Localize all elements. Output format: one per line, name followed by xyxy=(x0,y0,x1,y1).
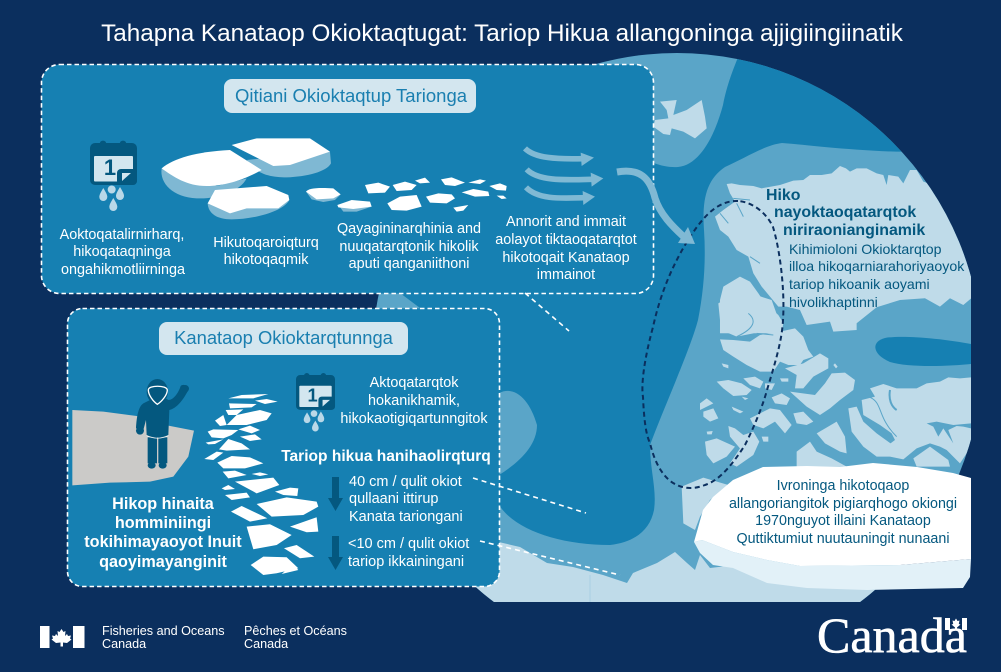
icon: large ice floes xyxy=(161,138,341,219)
panel: Canadian Arctic xyxy=(68,308,500,586)
heading: ice region: niriraonianginamik xyxy=(783,222,925,239)
panel heading pill xyxy=(224,79,476,113)
text: ice region: illoa hikoqarniarahoriyaoyok xyxy=(789,258,965,274)
logo text: French: Pêches et Océans xyxy=(244,624,347,638)
text: ice region: tariop hikoanik aoyami xyxy=(789,276,930,292)
text: step 2: hikotoqaqmik xyxy=(224,252,309,268)
heading: ice region: nayoktaoqatarqtok xyxy=(774,204,916,221)
heading: Inuit: qaoyimayanginit xyxy=(99,553,227,571)
text: 40 cm xyxy=(349,474,463,525)
text: step 4 xyxy=(495,214,637,283)
text: step 4: immainot xyxy=(537,267,595,283)
icon: person in parka xyxy=(136,379,189,469)
text: freeze-up xyxy=(340,375,488,427)
dashed ellipse: ice region xyxy=(642,201,783,488)
text: step 3: aputi qanganiithoni xyxy=(349,256,469,272)
logo text: French: Canada xyxy=(244,637,288,651)
map of the Arctic xyxy=(376,53,971,602)
leader line: 10 cm xyxy=(480,541,620,575)
icon: down arrow xyxy=(328,477,343,511)
text: step 1: Aoktoqatalirnirharq, xyxy=(60,227,184,243)
text: ice region: Kihimioloni Okioktarqtop xyxy=(789,241,942,257)
text: freeze-up: hikokaotigiqartunngitok xyxy=(340,411,488,427)
text: step 4: Annorit and immait xyxy=(506,214,626,230)
heading: Inuit: tokihimayaoyot Inuit xyxy=(84,533,242,551)
logo text: English: Canada xyxy=(102,637,146,651)
heading: sea ice decline: Tariop hikua hanihaolirqturq xyxy=(281,448,491,465)
text: step 2 xyxy=(213,235,319,268)
icon: wind arrows xyxy=(525,148,603,205)
text: step 3: Qayagininarqhinia and xyxy=(337,221,481,237)
text: 10 cm xyxy=(348,536,469,570)
icon: calendar with drops: 1 xyxy=(104,155,116,180)
text: 10 cm: <10 cm / qulit okiot xyxy=(348,536,469,552)
text: step 1: ongahikmotliirninga xyxy=(61,262,185,278)
heading: Inuit xyxy=(84,495,242,571)
logo: flag symbol xyxy=(40,626,84,648)
arrow: to the map xyxy=(617,171,695,244)
logo text: French xyxy=(244,624,347,651)
callout text: Ivroninga hikotoqaop xyxy=(777,478,909,494)
callout text: Quttiktumiut nuutauningit nunaani xyxy=(736,531,950,547)
text: step 4: aolayot tiktaoqatarqtot xyxy=(495,232,637,248)
heading: Inuit: homminiingi xyxy=(115,514,211,532)
panel: Last Ice Area xyxy=(42,64,654,294)
logo text: English: Fisheries and Oceans xyxy=(102,624,225,638)
text: step 2: Hikutoqaroiqturq xyxy=(213,235,319,251)
text: ice region: hivolikhaptinni xyxy=(789,294,878,310)
text: step 3: nuuqatarqtonik hikolik xyxy=(339,239,479,255)
icon: down arrow xyxy=(328,536,343,570)
text: step 4: hikotoqait Kanataop xyxy=(502,250,630,266)
text: 40 cm: qullaani ittirup xyxy=(349,491,438,507)
text: 40 cm: Kanata tariongani xyxy=(349,509,463,525)
heading: Inuit: Hikop hinaita xyxy=(112,495,215,513)
text: 40 cm: 40 cm / qulit okiot xyxy=(349,474,462,490)
logo text: English xyxy=(102,624,225,651)
callout text: allangoriangitok pigiarqhogo okiongi xyxy=(729,496,957,512)
text: 10 cm: tariop ikkainingani xyxy=(348,554,464,570)
logo: Canada wordmark: Canada xyxy=(817,607,967,663)
text: step 1: hikoqataqninga xyxy=(73,244,171,260)
callout text xyxy=(729,478,957,547)
panel heading pill xyxy=(159,322,408,355)
ice cap callout xyxy=(694,463,971,590)
text: freeze-up: hokanikhamik, xyxy=(368,393,460,409)
ice ground xyxy=(72,410,194,485)
heading: ice region xyxy=(766,187,925,239)
callout text: 1970nguyot illaini Kanataop xyxy=(755,513,931,529)
panel heading pill: Kanataop Okioktarqtunnga xyxy=(174,327,394,348)
icon: calendar with drops xyxy=(296,373,335,431)
icon: calendar with drops: 1 xyxy=(308,385,318,406)
leader line: panel to map xyxy=(525,293,569,331)
heading: ice region: Hiko xyxy=(766,187,801,204)
panel heading pill: Qitiani Okioktaqtup Tarionga xyxy=(235,85,468,106)
text: step 1 xyxy=(60,227,185,278)
icon: small ice floes xyxy=(337,177,507,212)
leader line: 40 cm xyxy=(473,478,586,513)
text: step 3 xyxy=(337,221,481,272)
title: Tahapna Kanataop Okioktaqtugat: Tariop Hikua allangoninga ajjigiingiinatik xyxy=(101,20,904,47)
text: ice region xyxy=(789,241,965,310)
icon: ice floe path xyxy=(204,394,318,575)
text: freeze-up: Aktoqatarqtok xyxy=(370,375,459,391)
icon: calendar with drops xyxy=(90,141,137,211)
